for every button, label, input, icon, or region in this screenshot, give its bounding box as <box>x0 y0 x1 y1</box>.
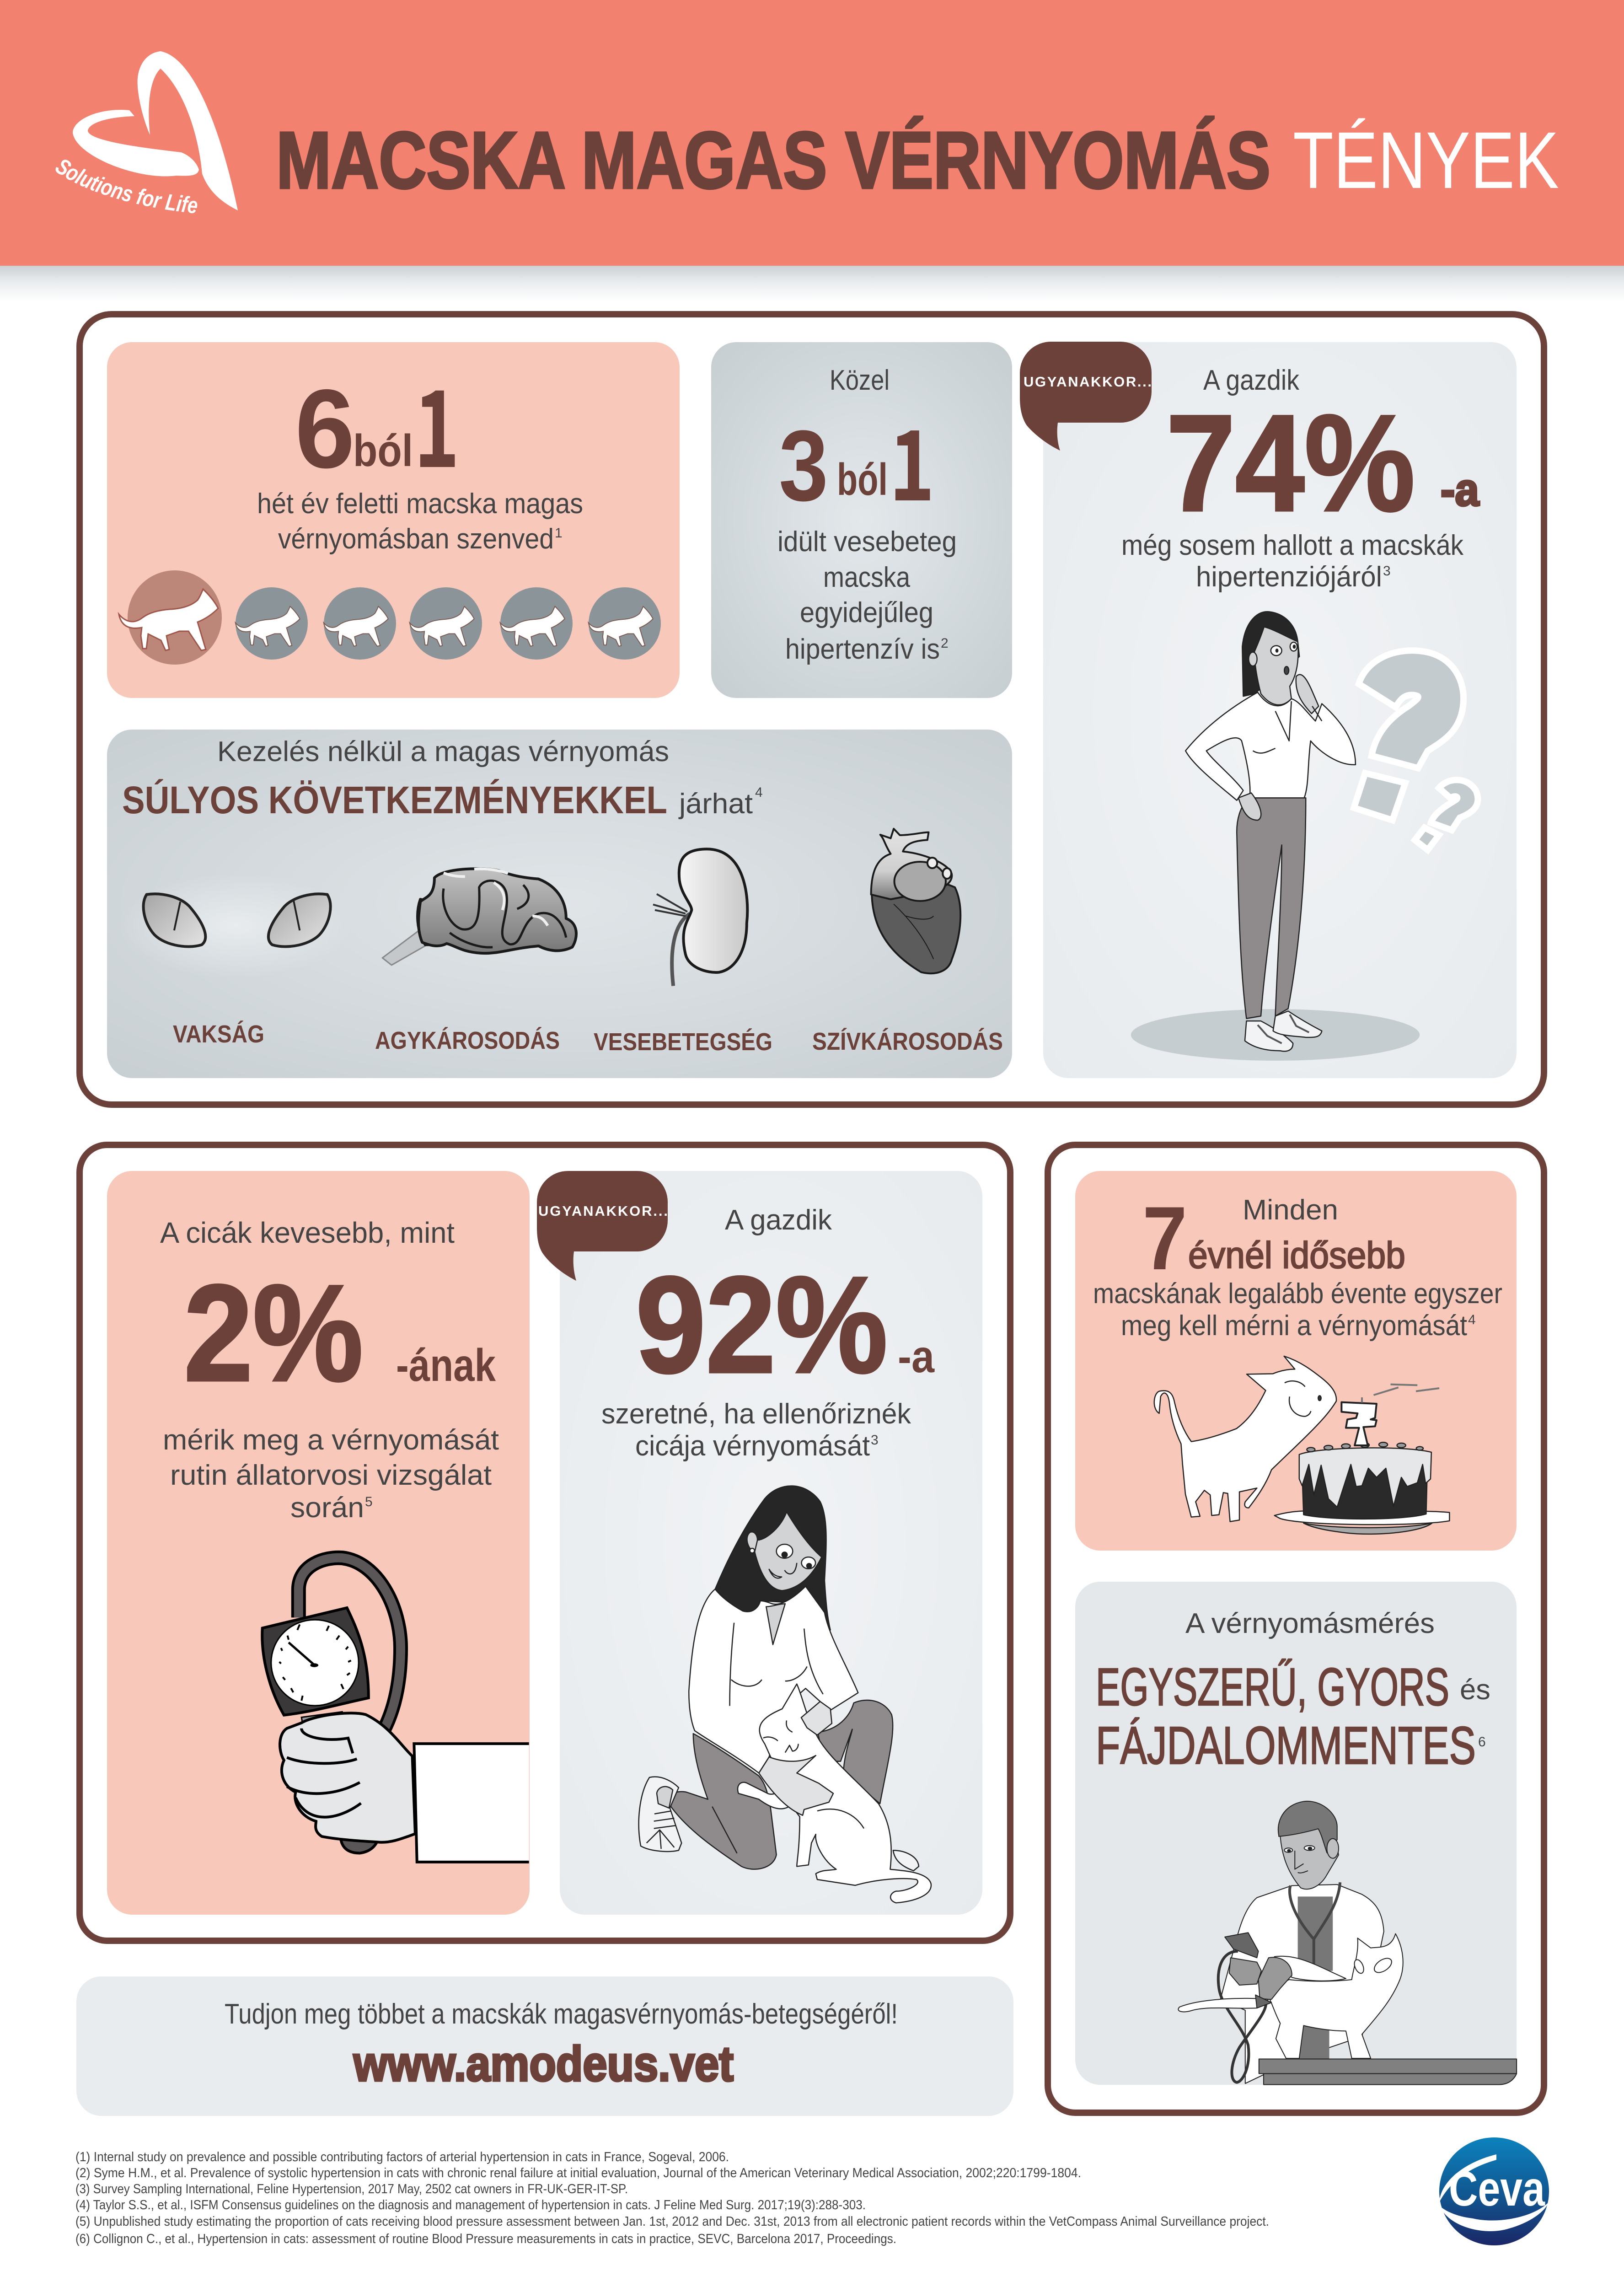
label: AGYKÁROSODÁS: AGYKÁROSODÁS <box>375 1027 560 1054</box>
text: call to action: Tudjon meg többet a macskák magasvérnyomás-betegségéről! <box>225 1998 898 2030</box>
card: consequences <box>107 730 1012 1078</box>
heading: simple, quick, painless: FÁJDALOMMENTES <box>1096 1716 1476 1775</box>
stat: 74% -a: -a <box>1441 464 1479 515</box>
text: description: még sosem hallott a macskák <box>1121 530 1464 561</box>
text: A gazdik: A gazdik <box>725 1204 832 1236</box>
card: owners 74% <box>1020 342 1517 1078</box>
text: website: www.amodeus.vet <box>353 2036 734 2091</box>
text: description: 3 <box>871 1433 879 1448</box>
text: description: egyidejűleg <box>800 597 933 628</box>
heading: consequences: Kezelés nélkül a magas vérnyomás <box>217 736 669 768</box>
panel: middle-left frame <box>80 1145 1010 1941</box>
stat: 6 ból 1: 6 <box>295 366 355 491</box>
stat: 7 évnél idősebb <box>1142 1188 1405 1288</box>
icon: heart <box>871 829 960 973</box>
panel: top frame <box>80 314 1544 1105</box>
text: description <box>1093 1278 1502 1342</box>
stat: 3 ból 1: 3 <box>779 409 828 522</box>
heading: simple, quick, painless: EGYSZERŰ, GYORS <box>1096 1657 1449 1717</box>
stat: 74% -a: 74% <box>1166 386 1415 540</box>
logo: Solutions for Life heart: Solutions for Life <box>51 153 199 219</box>
text: description: szeretné, ha ellenőriznék <box>601 1398 911 1430</box>
text: description: idült vesebeteg <box>777 526 957 558</box>
stat: 92% -a: -a <box>898 1331 935 1382</box>
text: description <box>257 488 583 555</box>
text: A gazdik: A gazdik <box>1203 365 1300 396</box>
text: description: során <box>290 1492 364 1524</box>
text: description: rutin állatorvosi vizsgálat <box>170 1460 492 1491</box>
card: 3-ból 1 <box>711 342 1012 698</box>
logo: Solutions for Life heart <box>51 51 238 219</box>
text: description <box>163 1424 499 1524</box>
stat: 2% -ának: 2% <box>184 1256 363 1410</box>
stat: 2% -ának <box>184 1256 496 1410</box>
illustration: woman petting cat <box>639 1486 931 1903</box>
footnotes: (6) Collignon C., et al., Hypertension in cats: assessment of routine Blood Pressure measurements in cats in practice, SEVC, Barcelona 2017, Proceedings. <box>75 2232 896 2246</box>
text: description <box>777 526 957 665</box>
heading: simple, quick, painless: és <box>1460 1674 1490 1706</box>
card: 2 percent <box>107 1171 530 1915</box>
text: description: hét év feletti macska magas <box>257 488 583 520</box>
icon: cat eyes <box>119 873 352 978</box>
text: description: mérik meg a vérnyomását <box>163 1424 499 1456</box>
heading: consequences: SÚLYOS KÖVETKEZMÉNYEKKEL <box>122 778 667 821</box>
text: description: 4 <box>1468 1312 1476 1327</box>
logo: Ceva: Ceva <box>1449 2161 1545 2216</box>
text: description <box>1121 530 1464 593</box>
panel: right frame <box>1048 1145 1544 2113</box>
icon: brain <box>382 869 576 965</box>
illustration: vet measuring cat blood pressure <box>1178 1801 1517 2084</box>
header band <box>0 0 1624 302</box>
text: description: 5 <box>365 1494 373 1509</box>
callout: UGYANAKKOR: UGYANAKKOR... <box>1024 374 1152 390</box>
heading: simple, quick, painless <box>1096 1657 1490 1775</box>
icon: kidney <box>653 849 747 986</box>
stat: 6 ból 1: 1 <box>414 344 460 498</box>
text: description: cicája vérnyomását <box>635 1430 870 1462</box>
text: intro: A cicák kevesebb, mint <box>160 1216 455 1249</box>
label: VESEBETEGSÉG: VESEBETEGSÉG <box>594 1028 772 1056</box>
footnotes: (1) Internal study on prevalence and possible contributing factors of arterial hypertension in cats in France, Sogeval, 2006. <box>75 2150 729 2164</box>
icon row: six cats, one highlighted <box>119 570 661 665</box>
text: Minden: Minden <box>1243 1194 1338 1226</box>
callout: UGYANAKKOR <box>1020 342 1152 451</box>
stat: 3 ból 1 <box>779 388 935 529</box>
illustration: blood pressure gauge in hand <box>262 1558 529 1862</box>
heading: consequences: járhat <box>678 788 753 820</box>
callout: UGYANAKKOR: UGYANAKKOR... <box>538 1203 668 1219</box>
text: description: 3 <box>1383 564 1391 579</box>
heading: simple, quick, painless: 6 <box>1478 1734 1486 1750</box>
footnotes: (4) Taylor S.S., et al., ISFM Consensus guidelines on the diagnosis and management of hypertension in cats. J Feline Med Surg. 2017;19(3):288-303. <box>75 2198 866 2212</box>
text: description: 2 <box>941 636 949 651</box>
label: VAKSÁG: VAKSÁG <box>173 1020 264 1048</box>
text: description: vérnyomásban szenved <box>278 523 554 555</box>
card: measurement simple <box>1075 1582 1517 2085</box>
stat: 7 évnél idősebb: 7 <box>1142 1188 1187 1288</box>
title: MACSKA MAGAS VÉRNYOMÁS <box>276 116 1270 205</box>
stat: 2% -ának: -ának <box>396 1340 496 1391</box>
text: description: 1 <box>555 526 563 541</box>
text: description: macskának legalább évente egyszer <box>1093 1278 1502 1310</box>
text: description: meg kell mérni a vérnyomását <box>1121 1310 1467 1342</box>
title: TÉNYEK <box>1293 116 1559 205</box>
heading: consequences <box>122 736 763 821</box>
footnotes <box>75 2150 1269 2246</box>
text: description: hipertenzív is <box>785 633 940 665</box>
text: description: macska <box>823 562 910 593</box>
card: learn more link <box>76 1976 1013 2116</box>
illustration: thinking woman with question marks <box>1131 612 1478 1061</box>
label: SZÍVKÁROSODÁS: SZÍVKÁROSODÁS <box>812 1028 1003 1055</box>
stat: 3 ból 1: 1 <box>889 388 935 529</box>
footnotes: (2) Syme H.M., et al. Prevalence of systolic hypertension in cats with chronic renal failure at initial evaluation, Journal of the American Veterinary Medical Association, 2002;220:1799-1804. <box>75 2166 1081 2180</box>
text: description: hipertenziójáról <box>1196 561 1382 593</box>
card: 6-ból 1 <box>107 342 680 698</box>
stat: 6 ból 1 <box>295 344 460 498</box>
stat: 7 évnél idősebb: évnél idősebb <box>1188 1235 1405 1276</box>
stat: 6 ból 1: ból <box>353 425 413 476</box>
illustration: cat with birthday cake <box>1154 1356 1449 1534</box>
text: description <box>601 1398 911 1462</box>
text: A vérnyomásmérés: A vérnyomásmérés <box>1185 1608 1435 1639</box>
heading: consequences: 4 <box>755 785 763 800</box>
footnotes: (3) Survey Sampling International, Feline Hypertension, 2017 May, 2502 cat owners in FR-UK-GER-IT-SP. <box>75 2182 628 2196</box>
stat: 3 ból 1: ból <box>837 454 888 505</box>
text: Közel: Közel <box>830 365 890 396</box>
stat: 92% -a: 92% <box>636 1248 888 1401</box>
card: older than 7 <box>1075 1171 1517 1551</box>
logo: Ceva <box>1439 2137 1549 2245</box>
callout: UGYANAKKOR <box>537 1171 668 1281</box>
footnotes: (5) Unpublished study estimating the proportion of cats receiving blood pressure assessment between Jan. 1st, 2012 and Dec. 31st, 2013 from all electronic patient records within the VetCompass Animal Surveillance project. <box>75 2214 1269 2229</box>
card: owners 92% <box>537 1171 982 1915</box>
